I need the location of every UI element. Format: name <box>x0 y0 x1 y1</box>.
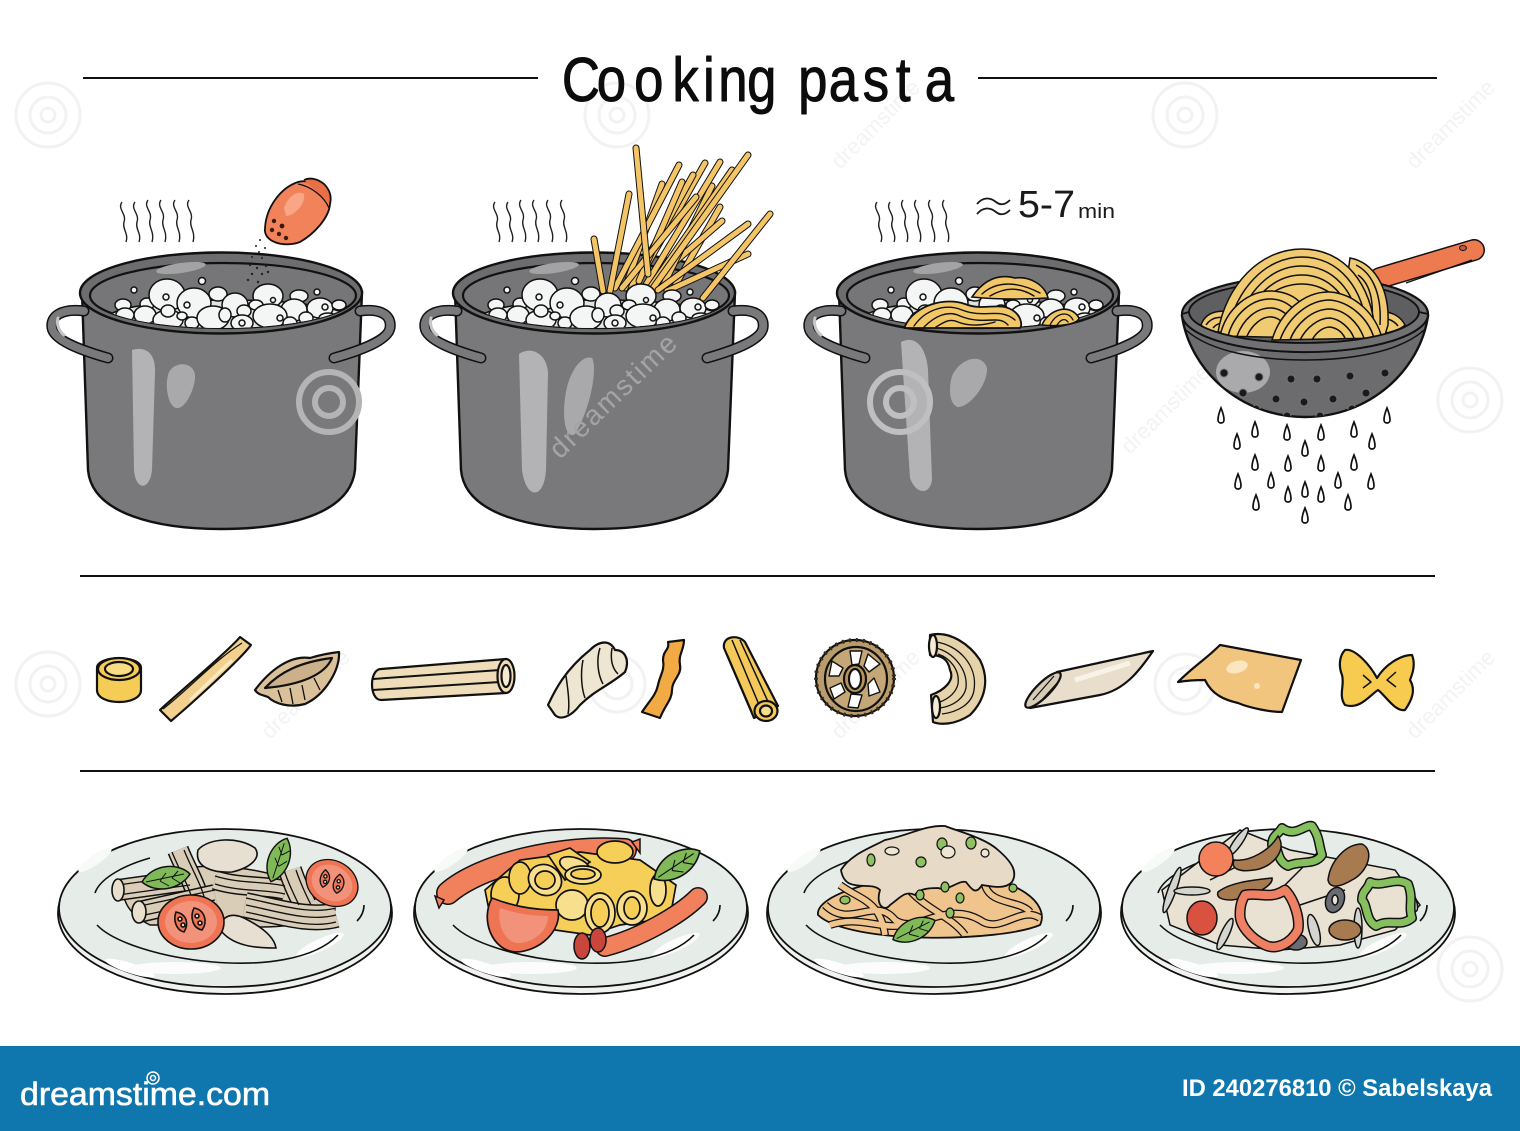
watermark spiral <box>870 372 930 432</box>
watermark pattern: dreamstime <box>826 75 925 174</box>
icon: steam <box>876 200 949 242</box>
small sausage with slices <box>574 897 698 959</box>
spaghetti in colander <box>1201 249 1405 340</box>
divider <box>80 770 1435 772</box>
pasta: shell <box>255 652 339 706</box>
tomato wedge <box>487 898 558 952</box>
pasta tubes <box>118 850 336 927</box>
cream sauce <box>840 826 1017 918</box>
watermark spiral <box>299 372 359 432</box>
tomato pieces <box>1187 842 1233 935</box>
olives <box>1285 885 1348 950</box>
colander front rim <box>1182 312 1428 360</box>
basil leaves <box>142 866 190 889</box>
panel: dish 2 rigatoni with sausage <box>414 829 748 994</box>
cooking time label: min <box>1078 201 1115 223</box>
colander handle <box>1380 246 1474 283</box>
icon: steam <box>121 200 194 242</box>
pasta: wheel <box>816 640 894 716</box>
panel: dish 4 penne with peppers <box>1121 826 1455 994</box>
icon: pot with spaghetti <box>425 148 770 529</box>
icon: steam <box>494 200 567 242</box>
panel: step 4 drain in colander <box>1182 246 1474 523</box>
watermark pattern: dreamstime <box>1401 75 1500 174</box>
watermark on pot: dreamstime <box>543 327 683 464</box>
colander bowl <box>1182 276 1428 420</box>
cooking time label: 5-7 <box>1018 184 1075 226</box>
icon: pot with boiling water <box>52 252 390 529</box>
penne <box>1160 826 1420 951</box>
pasta: fusilli twist <box>548 642 627 718</box>
pasta: flat stick <box>160 637 251 721</box>
panel: step 2 add spaghetti <box>425 148 770 529</box>
plate <box>414 829 748 994</box>
cooking time label <box>977 184 1115 226</box>
pasta: rigatoni tube <box>372 659 514 700</box>
footer bar <box>0 1046 1520 1131</box>
icon: pot with noodles <box>809 252 1147 529</box>
red pepper ring <box>1240 890 1298 947</box>
pasta: wavy strip <box>642 640 684 718</box>
panel: pasta shapes <box>97 634 1414 724</box>
pasta: ring <box>97 658 141 702</box>
yellow rigatoni pile <box>485 841 676 935</box>
pasta: spiral tube <box>724 637 778 721</box>
chicken pieces <box>197 840 257 872</box>
large sausage <box>435 839 640 908</box>
pasta: lasagne sheet <box>1178 645 1301 712</box>
panel: dish 3 noodles with cream sauce <box>767 826 1101 994</box>
plate <box>767 829 1101 994</box>
watermark pattern: dreamstime <box>1116 360 1215 459</box>
panel: step 1 boil water and add salt <box>52 179 390 529</box>
panel: step 3 cook 5-7 minutes <box>809 184 1147 529</box>
footer logo: dreamstime.com <box>20 1076 270 1112</box>
pasta: farfalle bow <box>1340 650 1414 710</box>
spaghetti bundle <box>594 148 770 298</box>
green pepper rings <box>1272 826 1412 926</box>
panel: dish 1 tubes with tomato and chicken <box>58 829 392 994</box>
pasta: penne <box>1021 651 1153 712</box>
plate <box>58 829 392 994</box>
title rule right <box>978 77 1437 79</box>
plate <box>1121 829 1455 994</box>
footer logo spiral <box>147 1072 159 1084</box>
title text: Cooking pasta <box>562 46 954 115</box>
noodles <box>818 875 1042 938</box>
divider <box>80 575 1435 577</box>
basil leaf <box>648 843 706 886</box>
watermark pattern: dreamstime <box>826 645 925 744</box>
watermark pattern: dreamstime <box>1401 645 1500 744</box>
pasta: half shell <box>929 634 985 724</box>
icon: salt shaker <box>247 179 331 283</box>
tomato slices <box>158 895 224 949</box>
footer credit: ID 240276810 © Sabelskaya <box>1182 1075 1493 1102</box>
water drops <box>1218 408 1390 523</box>
title rule left <box>83 77 538 79</box>
mushrooms <box>1218 836 1369 940</box>
basil leaf <box>889 913 939 946</box>
watermark pattern: dreamstime <box>256 645 355 744</box>
